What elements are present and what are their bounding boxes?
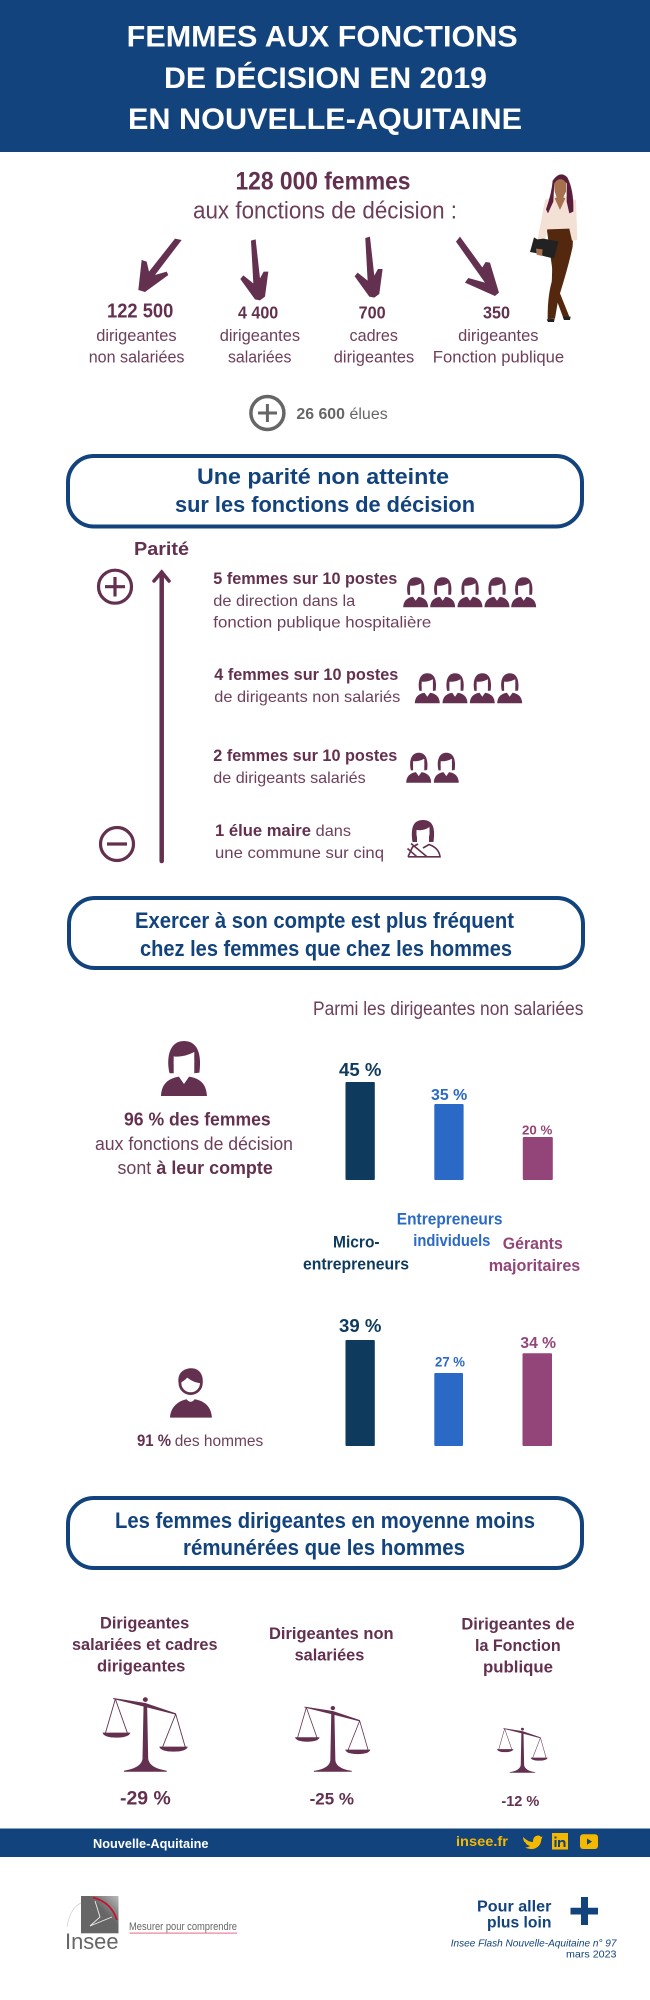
panel: salariées et cadres: salariées et cadres	[72, 1635, 218, 1654]
icon: twitter	[523, 1836, 542, 1849]
footer bar: Nouvelle-Aquitaine	[93, 1836, 208, 1851]
logo: Insee: Insee	[65, 1929, 118, 1954]
icon: plus circle	[98, 570, 132, 603]
panel: fonction publique: publique	[483, 1658, 553, 1677]
icon: scales	[295, 1706, 370, 1772]
item: 1 élue maire: 1 élue maire	[215, 822, 311, 840]
heading: exercer à son compte	[69, 898, 583, 968]
panel: fonction publique: Dirigeantes de	[461, 1614, 575, 1633]
label: Parité: Parité	[134, 539, 189, 559]
text: 96 % des femmes: sont	[118, 1158, 151, 1178]
icon: plus	[570, 1897, 598, 1925]
stat: 700: cadres	[350, 327, 398, 345]
stat: 26 600 élues	[251, 396, 388, 430]
call to action: pour aller plus loin: plus loin	[487, 1915, 551, 1932]
call to action: pour aller plus loin: mars 2023	[566, 1948, 617, 1960]
item: 4 femmes sur 10: de dirigeants non salariés	[214, 689, 400, 706]
bar chart: men	[339, 1315, 556, 1446]
icon: scales	[497, 1728, 548, 1773]
heading: exercer à son compte: Exercer à son compte est plus fréquent	[135, 908, 515, 933]
legend: categories: Entrepreneurs	[397, 1210, 502, 1228]
bar chart: men: 39 %	[339, 1315, 381, 1336]
text: 91 % des hommes: 91 %	[137, 1432, 171, 1450]
title banner: DE DÉCISION EN 2019	[164, 61, 487, 95]
bar chart: men: 34 %	[520, 1335, 556, 1352]
legend: categories: Gérants	[503, 1235, 563, 1253]
stat: 26 600 élues: 26 600	[296, 406, 345, 423]
item: 2 femmes sur 10	[213, 747, 459, 787]
item: 5 femmes sur 10: 5 femmes sur 10 postes	[213, 570, 397, 588]
item: 1 élue maire: une commune sur cinq	[215, 845, 384, 862]
title banner	[0, 0, 650, 152]
arrow 3	[355, 237, 383, 298]
stat: 350: 350	[483, 302, 510, 322]
icon: woman	[161, 1041, 207, 1096]
stat: 122 500: non salariées	[89, 349, 184, 367]
bar chart: women: 20 %	[522, 1122, 553, 1137]
panel: salariées et cadres: -29 %	[120, 1788, 171, 1809]
arrow: parity axis	[154, 572, 169, 861]
panel: breakdown of decision functions	[89, 237, 564, 367]
bar chart: women	[339, 1059, 553, 1180]
panel: fonction publique: -12 %	[501, 1794, 539, 1810]
logo: Insee	[65, 1896, 237, 1954]
item: 1 élue maire	[215, 820, 440, 862]
bar chart: men: 27 %	[435, 1354, 465, 1369]
item: 4 femmes sur 10	[214, 666, 522, 706]
heading: 128 000 femmes: aux fonctions de décision :	[193, 197, 457, 224]
panel: fonction publique: la Fonction	[475, 1636, 561, 1655]
panel: fonction publique	[461, 1614, 575, 1810]
icon: linkedin	[552, 1833, 568, 1850]
legend: categories: individuels	[413, 1232, 490, 1250]
icon: minus circle	[100, 828, 134, 860]
item: 2 femmes sur 10: de dirigeants salariés	[213, 770, 366, 787]
stat: 122 500	[89, 301, 184, 367]
heading: rémunération: rémunérées que les hommes	[183, 1535, 465, 1560]
icon: plus circle	[251, 396, 284, 430]
stat: 350	[433, 302, 564, 367]
text: 96 % des femmes: aux fonctions de décision	[95, 1134, 293, 1154]
title banner: EN NOUVELLE-AQUITAINE	[128, 103, 522, 136]
icon: woman figure	[530, 174, 577, 322]
arrow 1	[138, 239, 182, 292]
heading: parité non atteinte: Une parité non atteinte	[197, 464, 449, 489]
heading: 128 000 femmes	[193, 167, 457, 224]
bar chart: women: 35 %	[431, 1087, 467, 1104]
panel: non salariées: salariées	[295, 1646, 364, 1665]
text: 91 % des hommes: des hommes	[175, 1433, 263, 1450]
stat: 350: Fonction publique	[433, 349, 564, 367]
icon: four women	[415, 673, 522, 703]
stat: 4 400: salariées	[228, 349, 291, 367]
heading: 128 000 femmes: 128 000 femmes	[236, 167, 410, 195]
arrow 4	[456, 237, 499, 296]
stat: 700: dirigeantes	[334, 349, 414, 367]
footer bar	[0, 1828, 650, 1857]
panel: salariées et cadres: dirigeantes	[97, 1657, 185, 1676]
heading: rémunération	[68, 1498, 582, 1568]
chart subtitle: Parmi les dirigeantes non salariées	[313, 999, 583, 1020]
item: 5 femmes sur 10	[213, 570, 536, 632]
icon: man	[170, 1368, 212, 1418]
legend: categories: entrepreneurs	[303, 1255, 409, 1273]
panel: non salariées: -25 %	[310, 1789, 354, 1808]
icon: scales	[102, 1697, 188, 1772]
legend: categories: Micro-	[333, 1233, 380, 1251]
footer bar: insee.fr	[456, 1834, 509, 1849]
item: 5 femmes sur 10: de direction dans la	[213, 593, 355, 610]
legend: categories	[303, 1210, 580, 1275]
stat: 4 400: 4 400	[238, 302, 278, 322]
logo: Insee: Mesurer pour comprendre	[129, 1921, 237, 1933]
stat: 122 500: 122 500	[107, 301, 173, 323]
stat: 700	[334, 302, 414, 367]
legend: categories: majoritaires	[489, 1257, 580, 1275]
text: 96 % des femmes	[95, 1109, 293, 1178]
stat: 26 600 élues: élues	[350, 406, 388, 423]
stat: 700: 700	[359, 302, 386, 322]
stat: 4 400	[220, 302, 300, 367]
item: 1 élue maire: dans	[316, 823, 351, 840]
stat: 122 500: dirigeantes	[96, 327, 177, 345]
item: 5 femmes sur 10: fonction publique hospitalière	[213, 615, 431, 632]
call to action: pour aller plus loin	[451, 1897, 618, 1960]
icon: five women	[403, 577, 536, 607]
panel: salariées et cadres	[72, 1613, 218, 1809]
panel: salariées et cadres: Dirigeantes	[100, 1613, 189, 1632]
title banner: FEMMES AUX FONCTIONS	[127, 20, 518, 54]
item: 2 femmes sur 10: 2 femmes sur 10 postes	[213, 747, 397, 765]
heading: exercer à son compte: chez les femmes que chez les hommes	[140, 936, 512, 961]
heading: parité non atteinte: sur les fonctions de décision	[175, 492, 475, 517]
icon: youtube	[580, 1834, 598, 1849]
panel: non salariées: Dirigeantes non	[269, 1624, 394, 1643]
stat: 4 400: dirigeantes	[220, 327, 300, 345]
text: 91 % des hommes	[137, 1432, 263, 1450]
panel: non salariées	[269, 1624, 394, 1808]
icon: two women	[406, 753, 459, 783]
text: 96 % des femmes: à leur compte	[156, 1157, 273, 1178]
arrow 2	[240, 239, 268, 300]
heading: rémunération: Les femmes dirigeantes en moyenne moins	[115, 1508, 535, 1533]
text: 96 % des femmes: 96 % des femmes	[124, 1109, 271, 1130]
bar chart: women: 45 %	[339, 1059, 381, 1080]
heading: parité non atteinte	[68, 456, 582, 526]
call to action: pour aller plus loin: Pour aller	[477, 1899, 551, 1916]
icon: mayor	[408, 820, 440, 857]
call to action: pour aller plus loin: Insee Flash Nouvelle-Aquitaine n° 97	[451, 1938, 618, 1950]
item: 4 femmes sur 10: 4 femmes sur 10 postes	[214, 666, 398, 684]
stat: 350: dirigeantes	[458, 327, 538, 345]
